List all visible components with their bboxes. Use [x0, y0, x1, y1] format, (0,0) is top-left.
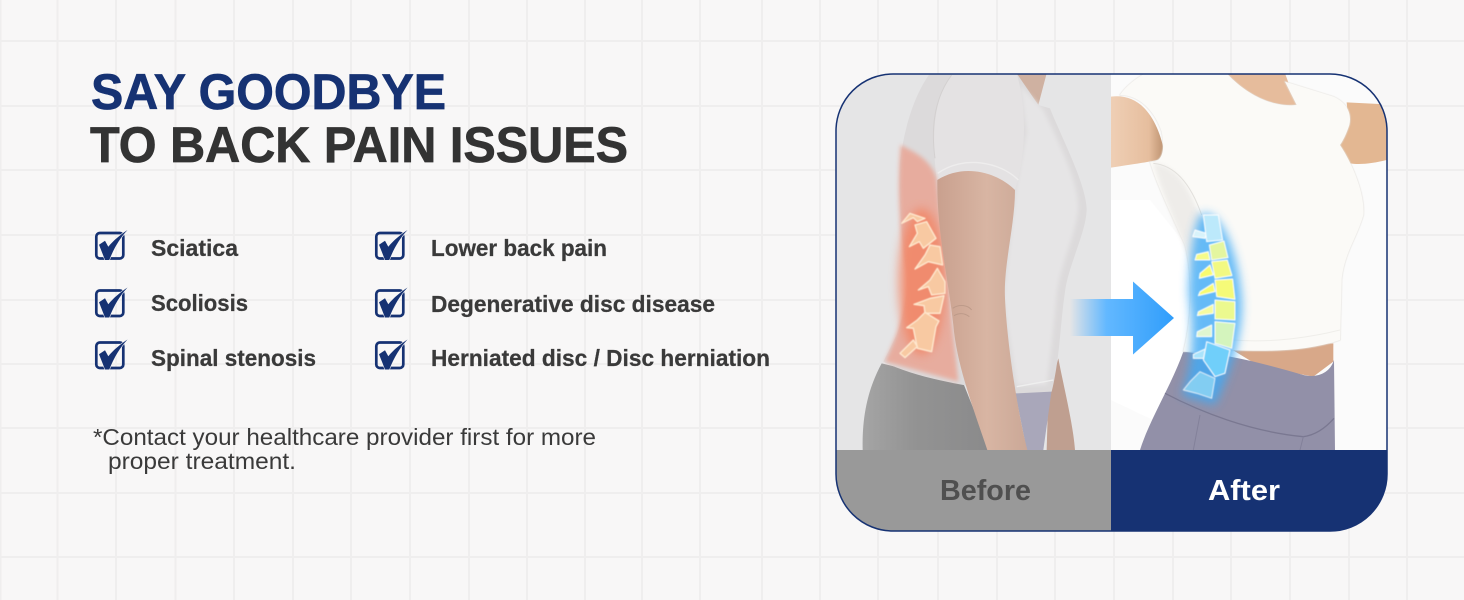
item: Herniated disc / Disc herniation: Herniated disc / Disc herniation: [431, 345, 770, 371]
disclaimer note: [93, 424, 596, 474]
blue glow: [1182, 214, 1242, 405]
left arm: [1111, 96, 1165, 168]
neck: [1018, 74, 1046, 105]
pants: [863, 363, 990, 450]
panel: before photo: [836, 73, 1111, 450]
pants: [1140, 352, 1335, 450]
condition checklist: [96, 230, 770, 371]
item: Lower back pain: [376, 230, 607, 261]
arm: [937, 171, 1027, 450]
item: Degenerative disc disease: Degenerative disc disease: [431, 291, 715, 317]
shirt edge shadow: [1120, 73, 1363, 352]
shirt front highlight: [1003, 85, 1078, 385]
midriff: [1230, 343, 1333, 377]
title: TO BACK PAIN ISSUES: [90, 117, 628, 173]
spine bones: [1183, 215, 1235, 398]
hem: [1017, 380, 1053, 387]
item: Scoliosis: Scoliosis: [151, 290, 248, 316]
title: [90, 64, 628, 173]
right arm: [1339, 102, 1387, 164]
item: Spinal stenosis: [96, 340, 316, 371]
disclaimer note: *Contact your healthcare provider first for more: [93, 424, 596, 450]
neck: [1227, 73, 1297, 105]
arrow: [1070, 282, 1174, 354]
far arm: [1047, 358, 1075, 450]
sleeve: [1012, 82, 1021, 180]
item: Sciatica: [96, 230, 238, 261]
item: Sciatica: Sciatica: [151, 235, 238, 261]
label: after: [1111, 450, 1387, 531]
shirt: [1120, 73, 1363, 352]
disclaimer note: proper treatment.: [108, 448, 296, 474]
item: Spinal stenosis: Spinal stenosis: [151, 345, 316, 371]
red pain glow: [885, 145, 958, 382]
before and after comparison card: [836, 73, 1387, 531]
item: Scoliosis: [96, 288, 248, 318]
spine bones: [900, 213, 945, 358]
title: SAY GOODBYE: [91, 64, 446, 120]
shirt shading: [1155, 165, 1199, 254]
label: after: After: [1208, 475, 1280, 507]
label: before: [836, 450, 1111, 531]
shirt: [883, 73, 1087, 393]
panel: after photo: [1111, 73, 1387, 450]
item: Lower back pain: Lower back pain: [431, 235, 607, 261]
label: before: Before: [940, 475, 1031, 507]
